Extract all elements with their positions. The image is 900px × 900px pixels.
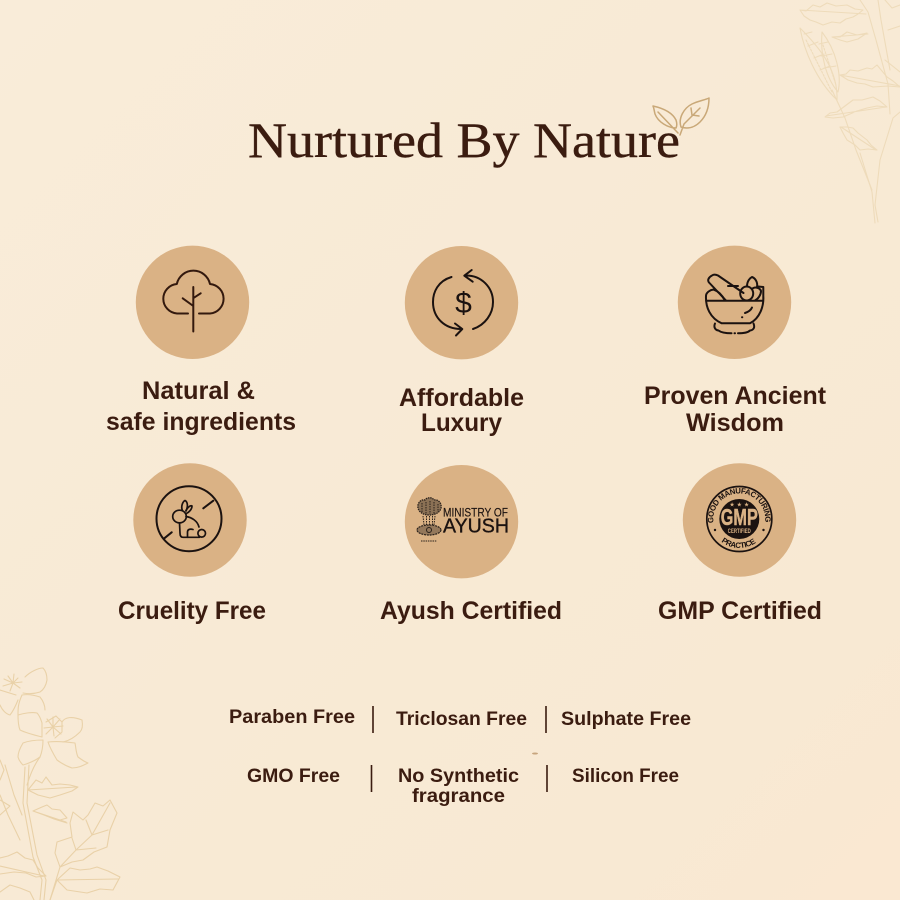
icon: gmp badge: CERTIFIED xyxy=(728,529,751,535)
icon: ministry of ayush logo xyxy=(405,465,518,578)
icon: crossed out rabbit xyxy=(133,463,247,577)
icon: mortar and pestle xyxy=(678,246,791,359)
label: ayush certified: Ayush Certified xyxy=(380,597,562,625)
label: affordable luxury: Luxury xyxy=(421,409,502,437)
panel: affordable luxury xyxy=(399,246,524,437)
icon: gmp badge: GMP xyxy=(721,504,758,530)
label: gmp certified: GMP Certified xyxy=(658,597,822,625)
icon: title leaves xyxy=(653,98,709,135)
icon: gmp badge: ★ ★ ★ xyxy=(729,502,749,508)
claim: paraben free: Paraben Free xyxy=(229,706,355,728)
claim: no synthetic fragrance: fragrance xyxy=(412,785,505,807)
icon: currency cycle: $ xyxy=(455,287,472,320)
panel: gmp certified xyxy=(658,463,822,625)
label: natural and safe ingredients: Natural & xyxy=(142,377,255,405)
icon: ministry of ayush logo: AYUSH xyxy=(443,516,509,538)
label: cruelty free: Cruelity Free xyxy=(118,597,266,625)
icon: gmp badge: GOOD MANUFACTURING xyxy=(708,488,771,523)
claim: gmo free: GMO Free xyxy=(247,765,340,787)
free-from claims list xyxy=(229,706,691,807)
label: natural and safe ingredients: safe ingredients xyxy=(106,408,296,436)
label: proven ancient wisdom: Proven Ancient xyxy=(644,382,827,410)
icon: ministry of ayush logo: MINISTRY OF xyxy=(443,506,508,520)
claim: triclosan free: Triclosan Free xyxy=(396,708,527,730)
icon: currency cycle xyxy=(405,246,518,359)
label: affordable luxury: Affordable xyxy=(399,384,524,412)
title: Nurtured By Nature xyxy=(248,112,680,168)
icon: tree xyxy=(136,246,249,359)
panel: ayush certified xyxy=(380,465,562,625)
icon: gmp badge: PRACTICE xyxy=(722,538,756,548)
label: proven ancient wisdom: Wisdom xyxy=(686,409,784,437)
panel: proven ancient wisdom xyxy=(644,246,827,437)
claim: silicon free: Silicon Free xyxy=(572,765,679,787)
botanical illustration: bottom left xyxy=(0,668,120,900)
claim: no synthetic fragrance: No Synthetic xyxy=(398,765,519,787)
botanical illustration: top right xyxy=(800,0,900,223)
icon: gmp badge xyxy=(682,463,796,577)
claim: sulphate free: Sulphate Free xyxy=(561,708,691,730)
panel: natural and safe ingredients xyxy=(106,246,296,436)
panel: cruelty free xyxy=(118,463,266,625)
